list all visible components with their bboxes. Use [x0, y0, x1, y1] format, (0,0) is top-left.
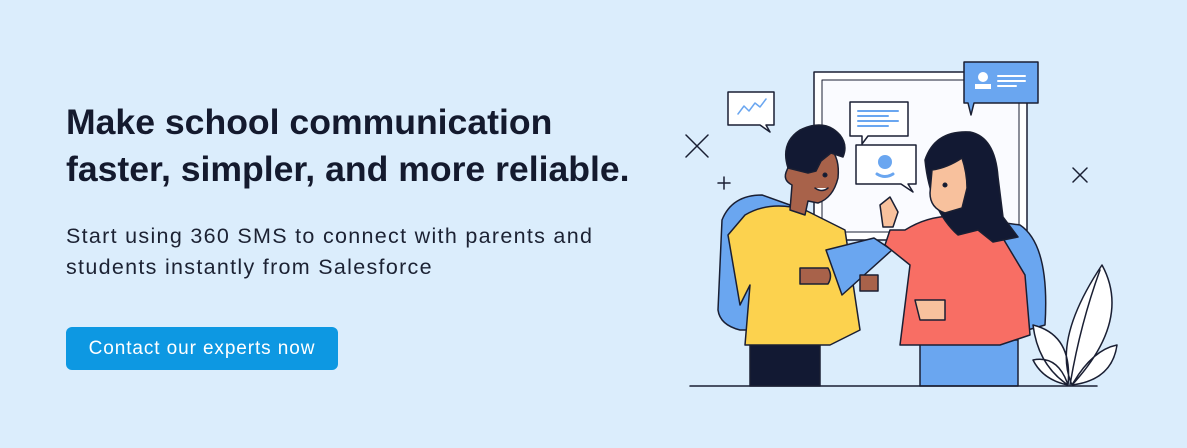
decorations: [686, 135, 1087, 189]
blue bubble: [964, 62, 1038, 115]
title: [66, 102, 630, 189]
boy: [718, 125, 892, 386]
board: [814, 72, 1027, 240]
subtitle: Start using 360 SMS to connect with parents and: [66, 224, 593, 248]
title: Make school communication: [66, 102, 552, 142]
avatar bubble: [856, 145, 916, 192]
button: [66, 327, 338, 370]
girl: [880, 132, 1046, 386]
subtitle: students instantly from Salesforce: [66, 255, 433, 279]
subtitle: [66, 224, 593, 279]
plant: [1033, 265, 1117, 385]
ground: [690, 385, 1097, 387]
button: Contact our experts now: [89, 338, 315, 359]
text bubble: [850, 102, 908, 144]
chart bubble: [728, 92, 774, 132]
title: faster, simpler, and more reliable.: [66, 149, 630, 189]
